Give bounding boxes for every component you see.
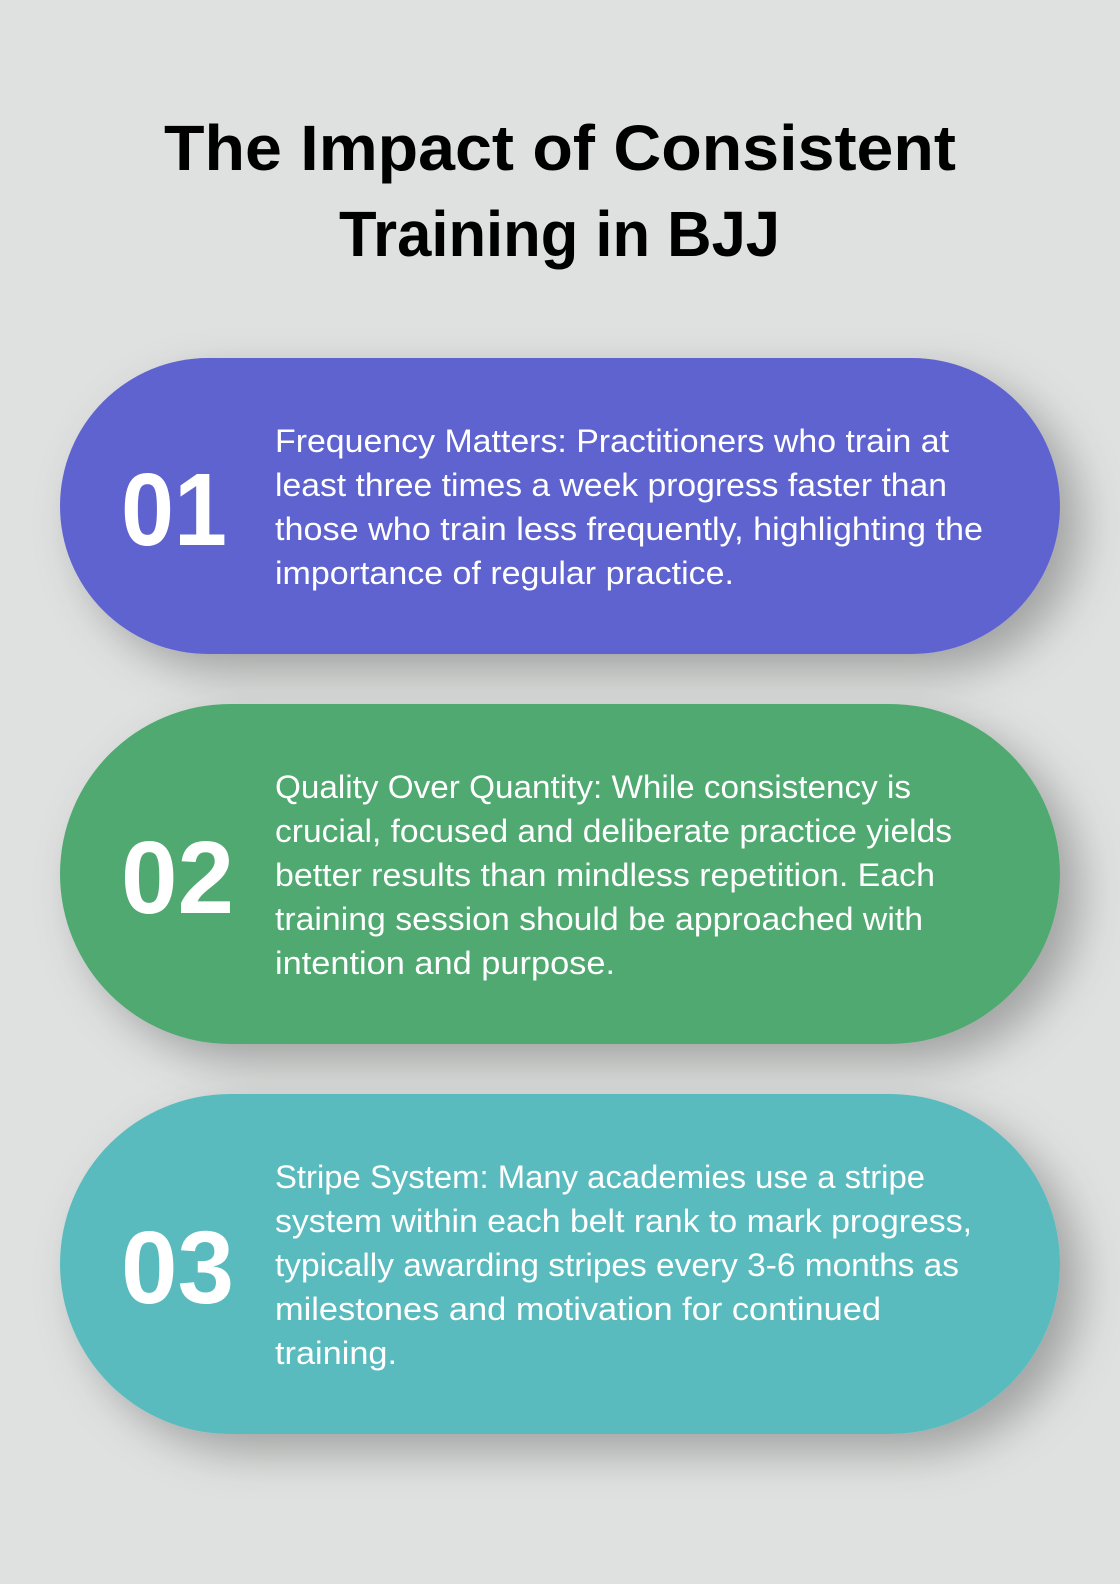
- text block: frequency matters: least three times a week progress faster than: [275, 467, 947, 503]
- text block: stripe system: training.: [275, 1335, 397, 1371]
- pill background green: [60, 704, 1060, 1044]
- pill background purple: [60, 358, 1060, 654]
- title: [164, 112, 956, 270]
- number 03: 03: [121, 1210, 234, 1325]
- panel: 02 quality over quantity: [60, 704, 1060, 1044]
- text block: stripe system: [275, 1159, 972, 1371]
- panel: 03 stripe system: [60, 1094, 1060, 1434]
- text block: stripe system: milestones and motivation for continued: [275, 1291, 881, 1327]
- text block: frequency matters: Frequency Matters: Practitioners who train at: [275, 423, 949, 459]
- title: Training in BJJ: [339, 198, 780, 270]
- text block: frequency matters: [275, 423, 983, 591]
- text block: frequency matters: importance of regular practice.: [275, 555, 734, 591]
- text block: stripe system: system within each belt rank to mark progress,: [275, 1203, 972, 1239]
- number 01: 01: [121, 452, 227, 567]
- number 02: 02: [121, 820, 234, 935]
- text block: quality over quantity: crucial, focused and deliberate practice yields: [275, 813, 952, 849]
- text block: quality over quantity: Quality Over Quantity: While consistency is: [275, 769, 911, 805]
- text block: quality over quantity: training session should be approached with: [275, 901, 923, 937]
- text block: stripe system: Stripe System: Many academies use a stripe: [275, 1159, 925, 1195]
- panel: 01 frequency matters: [60, 358, 1060, 654]
- text block: quality over quantity: intention and purpose.: [275, 945, 615, 981]
- text block: frequency matters: those who train less frequently, highlighting the: [275, 511, 983, 547]
- title: The Impact of Consistent: [164, 112, 956, 184]
- text block: quality over quantity: [275, 769, 952, 981]
- pill background teal: [60, 1094, 1060, 1434]
- text block: quality over quantity: better results than mindless repetition. Each: [275, 857, 935, 893]
- text block: stripe system: typically awarding stripes every 3-6 months as: [275, 1247, 959, 1283]
